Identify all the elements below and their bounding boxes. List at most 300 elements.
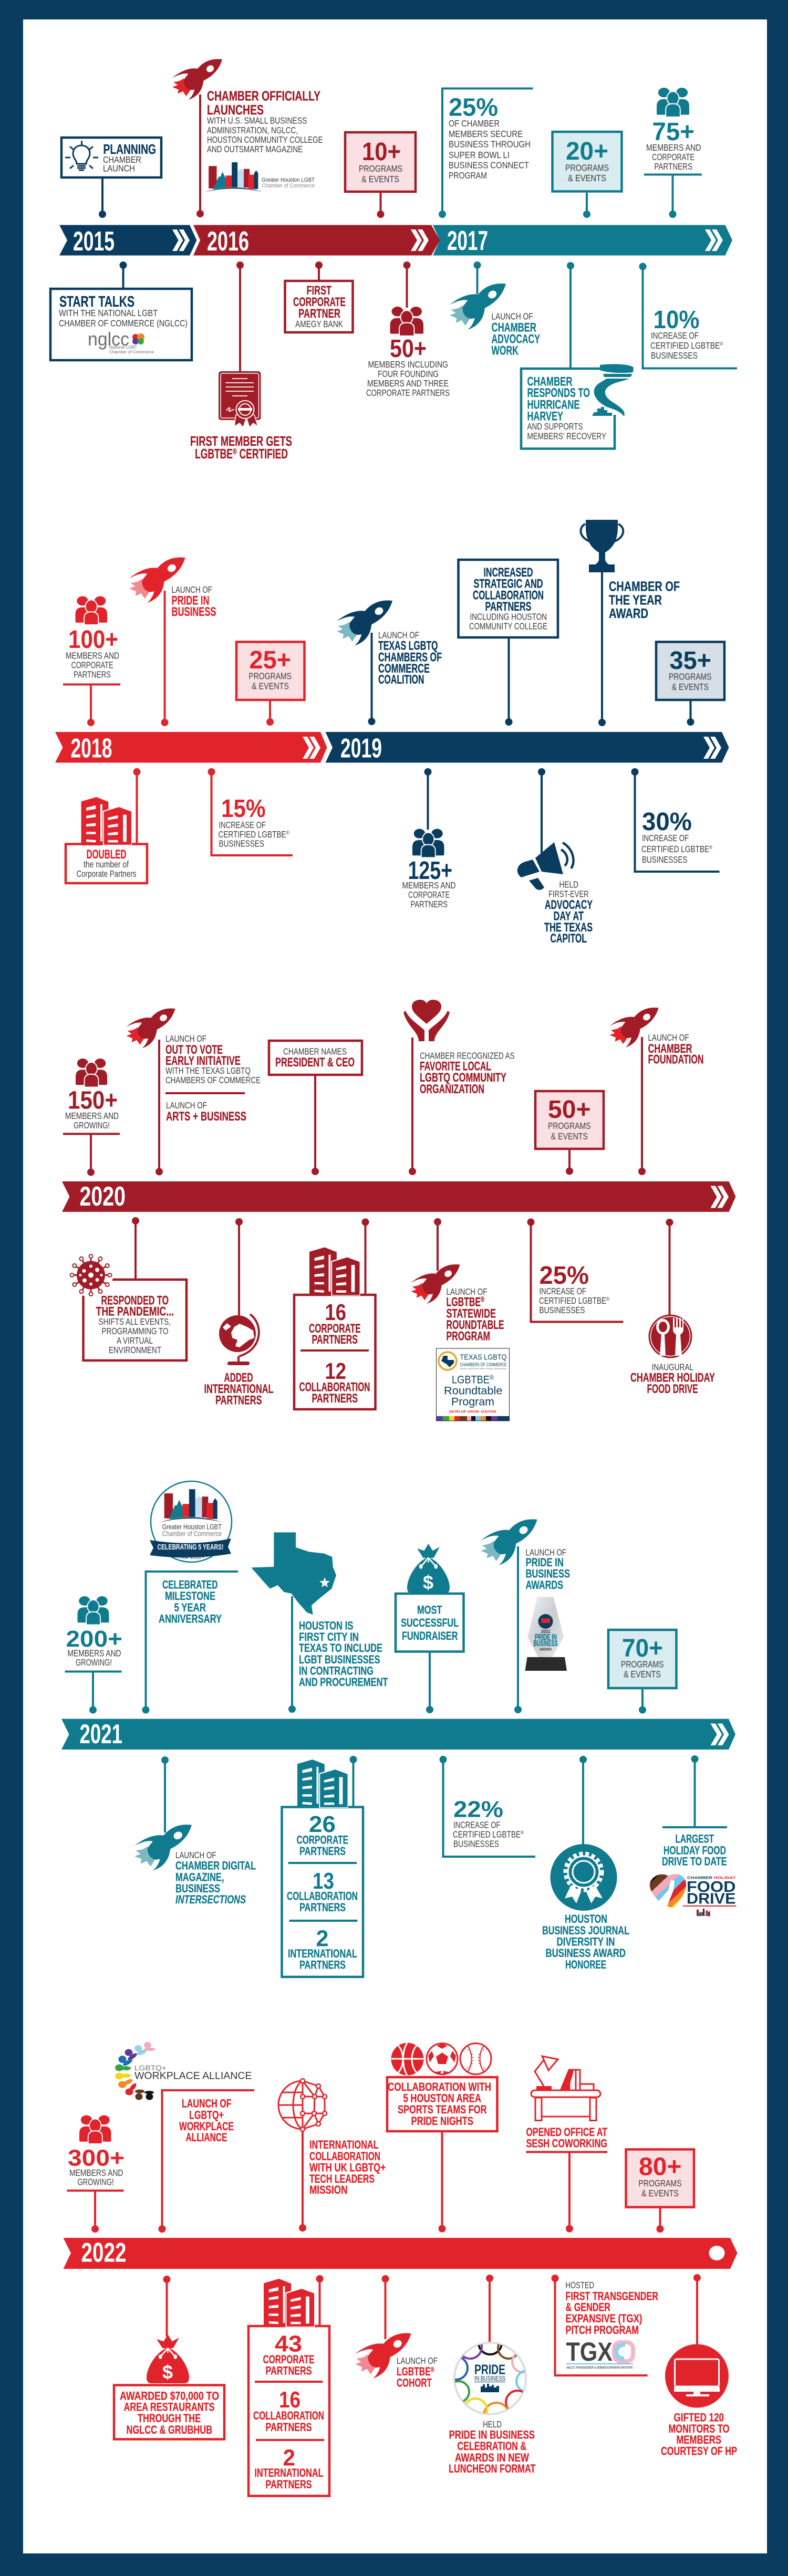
stat box: 50+ programs: PROGRAMS: [548, 1121, 590, 1131]
milestone: advocacy day at the texas capitol: CAPITOL: [551, 931, 587, 946]
milestone: sports teams pride nights: SPORTS TEAMS FOR: [398, 2103, 487, 2116]
icon: people: [78, 1596, 109, 1625]
milestone: houston first city lgbt contracting: LGBT BUSINESSES: [299, 1653, 380, 1666]
panel: 26 corporate, 13 collaboration, 2 international partners: PARTNERS: [299, 1845, 346, 1858]
milestone: largest holiday food drive: HOLIDAY FOOD: [663, 1844, 726, 1857]
logo: nglcc: nglcc: [88, 328, 129, 350]
panel: 43 corporate, 16 collaboration, 2 international partners: PARTNERS: [266, 2364, 312, 2378]
milestone: houston business journal award: HOUSTON: [565, 1912, 607, 1925]
stat: 30% certified: CERTIFIED LGBTBE®: [641, 844, 712, 854]
icon: people: [79, 2115, 111, 2144]
text: launches: HOUSTON COMMUNITY COLLEGE: [207, 134, 323, 145]
text: launches: WITH U.S. SMALL BUSINESS: [207, 116, 307, 126]
stat: 150+ members: [63, 1059, 120, 1176]
stat: 10% certified: CERTIFIED LGBTBE®: [650, 340, 723, 351]
logo: greater houston lgbt chamber: [205, 162, 315, 193]
milestone: gifted 120 monitors: MEMBERS: [677, 2433, 721, 2446]
logo card: roundtable program: [436, 1348, 510, 1421]
milestone: doubled corporate partners: the number of: [84, 859, 129, 870]
milestone: start talks with nglcc: START TALKS: [59, 294, 134, 310]
icon: rocket: [337, 600, 392, 646]
milestone: lgbtq+ workplace alliance: ALLIANCE: [186, 2131, 227, 2144]
stat box: 70+ programs: [608, 1630, 677, 1714]
milestone: gifted 120 monitors: GIFTED 120: [673, 2411, 724, 2424]
milestone: lgbtbe statewide roundtable program: [411, 1218, 510, 1421]
stat: 30% certified: 30%: [642, 808, 692, 836]
panel: 16 corporate and 12 collaboration partners: 16: [325, 1300, 346, 1325]
icon: rocket: [172, 59, 222, 100]
icon: trophy: [580, 520, 623, 572]
stat: 50+ members: MEMBERS INCLUDING: [368, 359, 448, 370]
stat box: 70+ programs: 70+: [622, 1635, 663, 1662]
milestone: awarded $70,000 to restaurants: AREA RESTAURANTS: [124, 2401, 214, 2413]
stat: 25% super bowl: OF CHAMBER: [449, 118, 500, 129]
logo card: roundtable program: DEVELOP. GROW. SUSTAIN.: [449, 1410, 497, 1413]
stat: 125+ members: [402, 768, 456, 909]
milestone: out to vote and arts + business: LAUNCH OF: [166, 1100, 207, 1111]
milestone: tgx pitch program: & GENDER: [565, 2301, 610, 2313]
milestone: lgbtq+ workplace alliance: LGBTQ+: [189, 2109, 224, 2121]
logo card: roundtable program: CHAMBERS OF COMMERCE: [460, 1362, 506, 1367]
logo: greater houston lgbt chamber: Greater Houston LGBT: [262, 177, 315, 183]
panel: 26 corporate, 13 collaboration, 2 international partners: 13: [313, 1868, 334, 1894]
milestone: doubled corporate partners: DOUBLED: [86, 847, 126, 862]
milestone: strategic and collaboration partners: PARTNERS: [485, 600, 532, 614]
stat: 15% certified: CERTIFIED LGBTBE®: [219, 829, 289, 840]
stat: 25% super bowl: PROGRAM: [449, 170, 487, 181]
icon: basketball, soccer ball, baseball: [391, 2043, 491, 2075]
logo: pride in business: IN BUSINESS: [474, 2374, 505, 2382]
logo: celebrating 5 years badge: • est. 2016 •: [179, 1555, 204, 1560]
logo: pride in business: PRIDE: [474, 2362, 505, 2378]
milestone: planning chamber launch: [61, 138, 161, 218]
stat box: 25+ programs: 25+: [249, 646, 291, 674]
milestone: strategic and collaboration partners: [458, 560, 558, 726]
milestone: 5 year anniversary: 5 YEAR: [174, 1601, 206, 1614]
milestone: chamber foundation: LAUNCH OF: [648, 1032, 689, 1043]
icon: people: [76, 596, 107, 625]
milestone: advocacy day at the texas capitol: [517, 768, 593, 946]
milestone: first corporate partner: [285, 261, 353, 332]
icon: heart in hands: [403, 1000, 450, 1041]
logo: greater houston lgbt chamber: Chamber of Commerce: [262, 183, 315, 189]
panel: 43 corporate, 16 collaboration, 2 international partners: 16: [279, 2387, 300, 2413]
milestone: houston first city lgbt contracting: HOUSTON IS: [299, 1619, 353, 1632]
milestone: added international partners: [204, 1218, 273, 1407]
milestone: lgbtbe statewide roundtable program: LAUNCH OF: [447, 1286, 488, 1297]
milestone: 5 year anniversary: MILESTONE: [165, 1589, 215, 1603]
stat: 75+ members: PARTNERS: [655, 161, 692, 172]
stat: 10% certified: 10%: [654, 306, 700, 334]
milestone: chamber names president and ceo: PRESIDENT & CEO: [275, 1055, 355, 1070]
milestone: texas lgbtq chambers coalition: LAUNCH OF: [378, 630, 419, 641]
icon: crystal award: AWARDS: [540, 1648, 552, 1652]
icon: people: [657, 88, 689, 117]
stat: 75+ members: [644, 88, 702, 218]
stat: 15% certified: BUSINESSES: [219, 838, 264, 849]
stat box: 20+ programs: & EVENTS: [568, 173, 606, 183]
milestone: international collaboration tech leaders: COLLABORATION: [309, 2150, 380, 2163]
icon: award medal: [551, 1844, 617, 1911]
icon: crystal award: BUSINESS: [534, 1639, 558, 1648]
milestone: responded to the pandemic: SHIFTS ALL EVENTS,: [99, 1316, 171, 1327]
stat: 15% certified: 15%: [221, 795, 266, 823]
milestone: inaugural chamber holiday food drive: FOOD DRIVE: [647, 1382, 698, 1396]
panel: 16 corporate and 12 collaboration partners: CORPORATE: [309, 1322, 360, 1336]
stat: 25% super bowl: SUPER BOWL LI: [449, 150, 510, 160]
icon: rocket: [134, 1825, 192, 1870]
stat: 200+ members: MEMBERS AND: [67, 1648, 121, 1658]
milestone: sports teams pride nights: COLLABORATION WITH: [388, 2080, 491, 2093]
stat: 25% certified: BUSINESSES: [539, 1305, 585, 1315]
milestone: strategic and collaboration partners: INCLUDING HOUSTON: [470, 611, 547, 622]
milestone: favorite local lgbtq organization: FAVORITE LOCAL: [420, 1060, 491, 1073]
milestone: inaugural chamber holiday food drive: CHAMBER HOLIDAY: [630, 1370, 715, 1385]
milestone: pride in business luncheon: PRIDE IN BUSINESS: [449, 2428, 535, 2442]
milestone: tgx pitch program: [552, 2275, 658, 2375]
milestone: pride in business: LAUNCH OF: [171, 584, 212, 595]
logo card: roundtable program: TEXAS LGBTQ: [460, 1353, 506, 1362]
milestone: chamber digital magazine: CHAMBER DIGITAL: [175, 1859, 256, 1872]
milestone: international collaboration tech leaders: MISSION: [309, 2183, 348, 2196]
milestone: awarded $70,000 to restaurants: [114, 2276, 224, 2439]
milestone: most successful fundraiser: FUNDRAISER: [402, 1629, 458, 1642]
stat: 25% certified: [527, 1218, 623, 1322]
milestone: strategic and collaboration partners: COMMUNITY COLLEGE: [469, 621, 547, 631]
milestone: responded to the pandemic: ENVIRONMENT: [109, 1345, 161, 1355]
panel: 43 corporate, 16 collaboration, 2 international partners: INTERNATIONAL: [254, 2466, 324, 2479]
panel: 43 corporate, 16 collaboration, 2 international partners: 43: [275, 2331, 302, 2357]
text: launches: CHAMBER OFFICIALLY: [207, 88, 320, 104]
icon: people: [412, 829, 444, 858]
stat box: 50+ programs: 50+: [548, 1096, 590, 1124]
milestone: inaugural chamber holiday food drive: [630, 1219, 715, 1396]
stat box: 50+ programs: & EVENTS: [551, 1131, 588, 1142]
milestone: international collaboration tech leaders: [278, 2079, 386, 2232]
stat: 50+ members: FOUR FOUNDING: [378, 369, 439, 379]
milestone: chamber of the year award: [580, 520, 680, 726]
milestone: added international partners: ADDED: [224, 1370, 253, 1385]
milestone: lgbtbe statewide roundtable program: STATEWIDE: [447, 1306, 496, 1321]
milestone: doubled corporate partners: Corporate Partners: [77, 868, 137, 879]
icon: crystal award: PRIDE IN: [535, 1633, 557, 1642]
panel: 43 corporate, 16 collaboration, 2 international partners: PARTNERS: [266, 2421, 312, 2434]
text: launches: LAUNCHES: [207, 102, 264, 118]
milestone: pride in business awards: BUSINESS: [525, 1567, 570, 1580]
stat: 15% certified: INCREASE OF: [219, 820, 266, 830]
icon: money bag: [147, 2334, 189, 2383]
panel: 16 corporate and 12 collaboration partners: 12: [325, 1358, 346, 1384]
stat: 30% certified: BUSINESSES: [642, 854, 687, 865]
milestone: lgbtq+ workplace alliance: LAUNCH OF: [182, 2097, 231, 2110]
milestone: favorite local lgbtq organization: CHAMBER RECOGNIZED AS: [420, 1050, 515, 1061]
stat: 25% certified: INCREASE OF: [539, 1286, 586, 1296]
logo: celebrating 5 years badge: Chamber of Commerce: [162, 1529, 222, 1537]
section: 2015-2017 timeline: [50, 59, 737, 462]
milestone: chamber digital magazine: [134, 1756, 256, 1906]
icon: rocket: [129, 557, 185, 603]
stat: 10% certified: BUSINESSES: [651, 350, 698, 361]
icon: rocket: [126, 1008, 175, 1048]
icon: spoon and fork: [648, 1315, 692, 1358]
panel: 16 corporate and 12 collaboration partners: [294, 1218, 375, 1409]
icon: rocket: [411, 1264, 460, 1304]
milestone: chamber advocacy work: LAUNCH OF: [492, 311, 533, 321]
section: 2021 timeline: [61, 1481, 737, 1977]
icon: network globe: [278, 2079, 327, 2131]
logo: tgx: TGX: [566, 2337, 613, 2366]
milestone: chamber foundation: FOUNDATION: [648, 1052, 704, 1067]
milestone: out to vote and arts + business: ARTS + BUSINESS: [166, 1109, 246, 1124]
stat: 100+ members: CORPORATE: [71, 659, 113, 670]
stat: 50+ members: 50+: [390, 335, 427, 363]
milestone: sports teams pride nights: [387, 2043, 497, 2233]
logo: lgbtq+ workplace alliance: WORKPLACE ALLIANCE: [134, 2071, 252, 2081]
milestone: tgx pitch program: PITCH PROGRAM: [565, 2323, 639, 2337]
icon: virus: [69, 1253, 113, 1297]
milestone: pride in business: BUSINESS: [171, 605, 216, 619]
timeline bar: 2019: 2019: [340, 733, 382, 763]
milestone: responded to the pandemic: A VIRTUAL: [117, 1335, 153, 1346]
milestone: advocacy day at the texas capitol: HELD: [559, 879, 578, 889]
stat box: 70+ programs: & EVENTS: [624, 1669, 661, 1679]
stat: 100+ members: [63, 596, 120, 726]
stat: 100+ members: PARTNERS: [74, 669, 111, 679]
icon: rocket: [450, 284, 506, 330]
milestone: awarded $70,000 to restaurants: THROUGH THE: [138, 2412, 201, 2425]
icon: rocket: [355, 2333, 411, 2379]
stat box: 35+ programs: PROGRAMS: [669, 671, 711, 682]
milestone: lgbtbe cohort: LGBTBE®: [397, 2365, 434, 2378]
milestone: lgbtbe cohort: [355, 2275, 438, 2389]
milestone: houston business journal award: BUSINESS AWARD: [545, 1946, 626, 1960]
milestone: texas lgbtq chambers coalition: COALITION: [378, 673, 424, 687]
icon: desk with lamp: [531, 2056, 600, 2120]
milestone: out to vote and arts + business: CHAMBERS OF COMMERCE: [165, 1075, 261, 1085]
panel: 16 corporate and 12 collaboration partners: PARTNERS: [312, 1333, 358, 1347]
stat: 200+ members: 200+: [66, 1626, 122, 1652]
stat box: 35+ programs: [656, 642, 724, 726]
milestone: pride in business luncheon: LUNCHEON FORMAT: [449, 2462, 536, 2475]
text: launches: AND OUTSMART MAGAZINE: [207, 144, 303, 154]
milestone: responded to the pandemic: [69, 1217, 186, 1360]
milestone: texas lgbtq chambers coalition: COMMERCE: [378, 662, 430, 676]
icon: buildings: [81, 797, 132, 845]
milestone: houston first city lgbt contracting: [251, 1532, 388, 1713]
milestone: first corporate partner: AMEGY BANK: [295, 319, 343, 329]
stat box: 20+ programs: 20+: [566, 138, 608, 165]
stat: 75+ members: MEMBERS AND: [646, 142, 701, 153]
stat: 22% certified: 22%: [453, 1797, 503, 1822]
stat box: 25+ programs: & EVENTS: [252, 680, 289, 691]
milestone: pride in business: [129, 557, 216, 726]
stat: 25% super bowl: [439, 88, 533, 218]
timeline bar: 2022: [63, 2238, 738, 2269]
milestone: gifted 120 monitors: COURTESY OF HP: [661, 2445, 737, 2457]
milestone: out to vote and arts + business: [126, 1008, 261, 1175]
icon: buildings: [264, 2279, 315, 2327]
milestone: advocacy day at the texas capitol: DAY AT: [554, 909, 584, 923]
stat: 22% certified: CERTIFIED LGBTBE®: [453, 1829, 524, 1840]
logo: food drive: [650, 1874, 737, 1917]
stat box: 70+ programs: PROGRAMS: [621, 1659, 664, 1670]
stat: 300+ members: GROWING!: [78, 2177, 113, 2187]
timeline bar: 2015: 2015: [73, 226, 115, 257]
milestone: opened office at sesh coworking: SESH COWORKING: [526, 2137, 607, 2150]
stat box: 20+ programs: [553, 132, 622, 218]
stat: 200+ members: GROWING!: [76, 1657, 112, 1668]
milestone: 5 year anniversary: [142, 1572, 238, 1714]
milestone: pride in business luncheon: CELEBRATION &: [457, 2439, 526, 2453]
stat: 300+ members: 300+: [68, 2145, 125, 2171]
milestone: lgbtq+ workplace alliance: WORKPLACE: [179, 2120, 234, 2133]
icon: crystal award: [525, 1597, 567, 1671]
stat: 300+ members: MEMBERS AND: [69, 2167, 123, 2178]
stat box: 25+ programs: [236, 642, 305, 726]
logo card: roundtable program: AUSTIN • HOUSTON • NORTH TEXAS • SAN ANTONIO: [460, 1368, 507, 1370]
stat: 75+ members: 75+: [652, 118, 694, 146]
stat box: 20+ programs: PROGRAMS: [565, 163, 609, 173]
milestone: pride in business luncheon: HELD: [483, 2419, 502, 2430]
stat box: 80+ programs: 80+: [639, 2153, 682, 2181]
milestone: favorite local lgbtq organization: ORGANIZATION: [420, 1082, 484, 1096]
milestone: sports teams pride nights: PRIDE NIGHTS: [411, 2114, 473, 2128]
milestone: start talks with nglcc: [50, 261, 192, 360]
stat: 150+ members: MEMBERS AND: [65, 1111, 119, 1121]
text: planning: CHAMBER: [103, 154, 141, 165]
icon: lightbulb: [65, 141, 98, 170]
logo: pride in business: [453, 2342, 527, 2415]
milestone: favorite local lgbtq organization: LGBTQ COMMUNITY: [420, 1071, 506, 1085]
stat box: 10+ programs: & EVENTS: [361, 174, 399, 184]
milestone: start talks with nglcc: CHAMBER OF COMMERCE (NGLCC): [59, 318, 188, 329]
stat: 22% certified: BUSINESSES: [453, 1839, 499, 1849]
stat box: 10+ programs: 10+: [362, 138, 401, 166]
milestone: chamber digital magazine: INTERSECTIONS: [175, 1893, 246, 1906]
milestone: advocacy day at the texas capitol: ADVOCACY: [545, 898, 593, 912]
stat box: 25+ programs: PROGRAMS: [249, 671, 292, 682]
stat: 25% super bowl: MEMBERS SECURE: [449, 129, 523, 139]
milestone: pride in business awards: AWARDS: [525, 1578, 563, 1591]
milestone: strategic and collaboration partners: INCREASED: [483, 566, 533, 580]
milestone: texas lgbtq chambers coalition: CHAMBERS OF: [378, 650, 442, 665]
milestone: hurricane harvey: RESPONDS TO: [527, 386, 590, 400]
milestone: houston first city lgbt contracting: TEXAS TO INCLUDE: [299, 1641, 382, 1654]
stat: 200+ members: [65, 1596, 122, 1714]
milestone: responded to the pandemic: PROGRAMMING TO: [102, 1326, 168, 1336]
stat: 25% super bowl: BUSINESS CONNECT: [449, 160, 529, 170]
milestone: chamber foundation: CHAMBER: [648, 1042, 692, 1056]
icon: crystal award: 2021: [541, 1629, 551, 1634]
milestone: doubled corporate partners: [66, 768, 147, 883]
milestone: lgbtbe statewide roundtable program: LGBTBE®: [447, 1295, 484, 1310]
panel: 26 corporate, 13 collaboration, 2 international partners: CORPORATE: [296, 1834, 348, 1846]
icon: certificate: [219, 371, 261, 427]
icon: megaphone: [517, 842, 574, 890]
panel: 26 corporate, 13 collaboration, 2 international partners: [282, 1756, 363, 1977]
milestone: first corporate partner: PARTNER: [298, 307, 340, 321]
milestone: chamber advocacy work: [450, 261, 540, 358]
icon: rocket: [609, 1008, 659, 1048]
logo card: roundtable program: LGBTBE®: [452, 1374, 494, 1386]
icon: rocket: [481, 1519, 537, 1565]
timeline bar: 2016: 2016: [207, 226, 249, 257]
milestone: houston business journal award: [542, 1756, 629, 1971]
milestone: pride in business luncheon: AWARDS IN NEW: [455, 2451, 529, 2464]
stat: 150+ members: GROWING!: [74, 1120, 110, 1130]
stat: 22% certified: INCREASE OF: [453, 1820, 500, 1830]
milestone: most successful fundraiser: MOST: [417, 1604, 442, 1616]
milestone: first member lgbtbe certified: LGBTBE® CERTIFIED: [195, 446, 288, 462]
text: launches: ADMINISTRATION, NGLCC,: [207, 125, 298, 135]
panel: 43 corporate, 16 collaboration, 2 international partners: CORPORATE: [263, 2353, 314, 2366]
milestone: first member lgbtbe certified: FIRST MEMBER GETS: [190, 433, 292, 449]
section: 2020 timeline: [62, 1000, 735, 1421]
milestone: tgx pitch program: FIRST TRANSGENDER: [565, 2289, 658, 2303]
milestone: chamber names president and ceo: [269, 1041, 362, 1175]
timeline bar: 2018: [55, 732, 327, 763]
logo: food drive: DRIVE: [687, 1890, 735, 1907]
milestone: chamber of the year award: CHAMBER OF: [609, 579, 680, 594]
timeline bar: 2017: [433, 225, 732, 256]
stat: 125+ members: CORPORATE: [408, 889, 450, 900]
stat: 75+ members: CORPORATE: [652, 152, 694, 162]
panel: 43 corporate, 16 collaboration, 2 international partners: PARTNERS: [266, 2478, 312, 2491]
milestone: start talks with nglcc: WITH THE NATIONAL LGBT: [59, 308, 158, 318]
milestone: chamber advocacy work: WORK: [492, 343, 519, 358]
milestone: houston first city lgbt contracting: FIRST CITY IN: [299, 1630, 359, 1643]
logo: celebrating 5 years badge: Greater Houston LGBT: [162, 1523, 222, 1531]
milestone: out to vote and arts + business: WITH THE TEXAS LGBTQ: [165, 1065, 251, 1076]
timeline bar: 2016: [193, 225, 440, 257]
milestone: most successful fundraiser: [396, 1544, 463, 1713]
milestone: chamber of the year award: THE YEAR: [609, 592, 662, 608]
milestone: lgbtbe cohort: LAUNCH OF: [397, 2355, 438, 2366]
timeline bar: 2015: [59, 225, 196, 257]
milestone: largest holiday food drive: LARGEST: [676, 1832, 714, 1845]
timeline bar: 2021: 2021: [80, 1719, 122, 1750]
panel: 26 corporate, 13 collaboration, 2 international partners: 26: [309, 1811, 336, 1837]
milestone: first member lgbtbe certified: [190, 261, 292, 462]
milestone: houston first city lgbt contracting: AND PROCUREMENT: [299, 1676, 388, 1689]
milestone: chamber of the year award: AWARD: [609, 605, 648, 621]
milestone: tgx pitch program: HOSTED: [565, 2280, 594, 2290]
milestone: opened office at sesh coworking: OPENED OFFICE AT: [526, 2125, 607, 2139]
stat box: 50+ programs: [535, 1091, 604, 1175]
stat: 150+ members: 150+: [68, 1087, 118, 1114]
milestone: out to vote and arts + business: OUT TO VOTE: [165, 1043, 223, 1057]
milestone: first corporate partner: FIRST: [307, 284, 331, 298]
logo: food drive: FOOD: [687, 1879, 735, 1896]
timeline bar: 2022: 2022: [81, 2238, 126, 2268]
panel: 26 corporate, 13 collaboration, 2 international partners: COLLABORATION: [287, 1889, 358, 1903]
stat box: 80+ programs: PROGRAMS: [639, 2178, 682, 2188]
logo: nglcc: Chamber of Commerce: [109, 350, 154, 354]
timeline bar: 2018: 2018: [70, 733, 112, 763]
milestone: texas lgbtq chambers coalition: [337, 600, 442, 725]
milestone: awarded $70,000 to restaurants: NGLCC & GRUBHUB: [126, 2423, 212, 2436]
milestone: largest holiday food drive: DRIVE TO DATE: [662, 1855, 727, 1868]
milestone: chamber foundation: [609, 1008, 704, 1175]
logo: celebrating 5 years badge: CELEBRATING 5 YEARS!: [158, 1543, 224, 1552]
milestone: chamber digital magazine: MAGAZINE,: [175, 1870, 224, 1884]
milestone: pride in business awards: [481, 1519, 570, 1713]
stat box: 80+ programs: & EVENTS: [641, 2188, 679, 2198]
panel: 26 corporate, 13 collaboration, 2 international partners: INTERNATIONAL: [288, 1947, 357, 1960]
stat: 10% certified: INCREASE OF: [651, 330, 699, 341]
milestone: favorite local lgbtq organization: [403, 1000, 515, 1175]
milestone: texas lgbtq chambers coalition: TEXAS LGBTQ: [378, 638, 438, 653]
